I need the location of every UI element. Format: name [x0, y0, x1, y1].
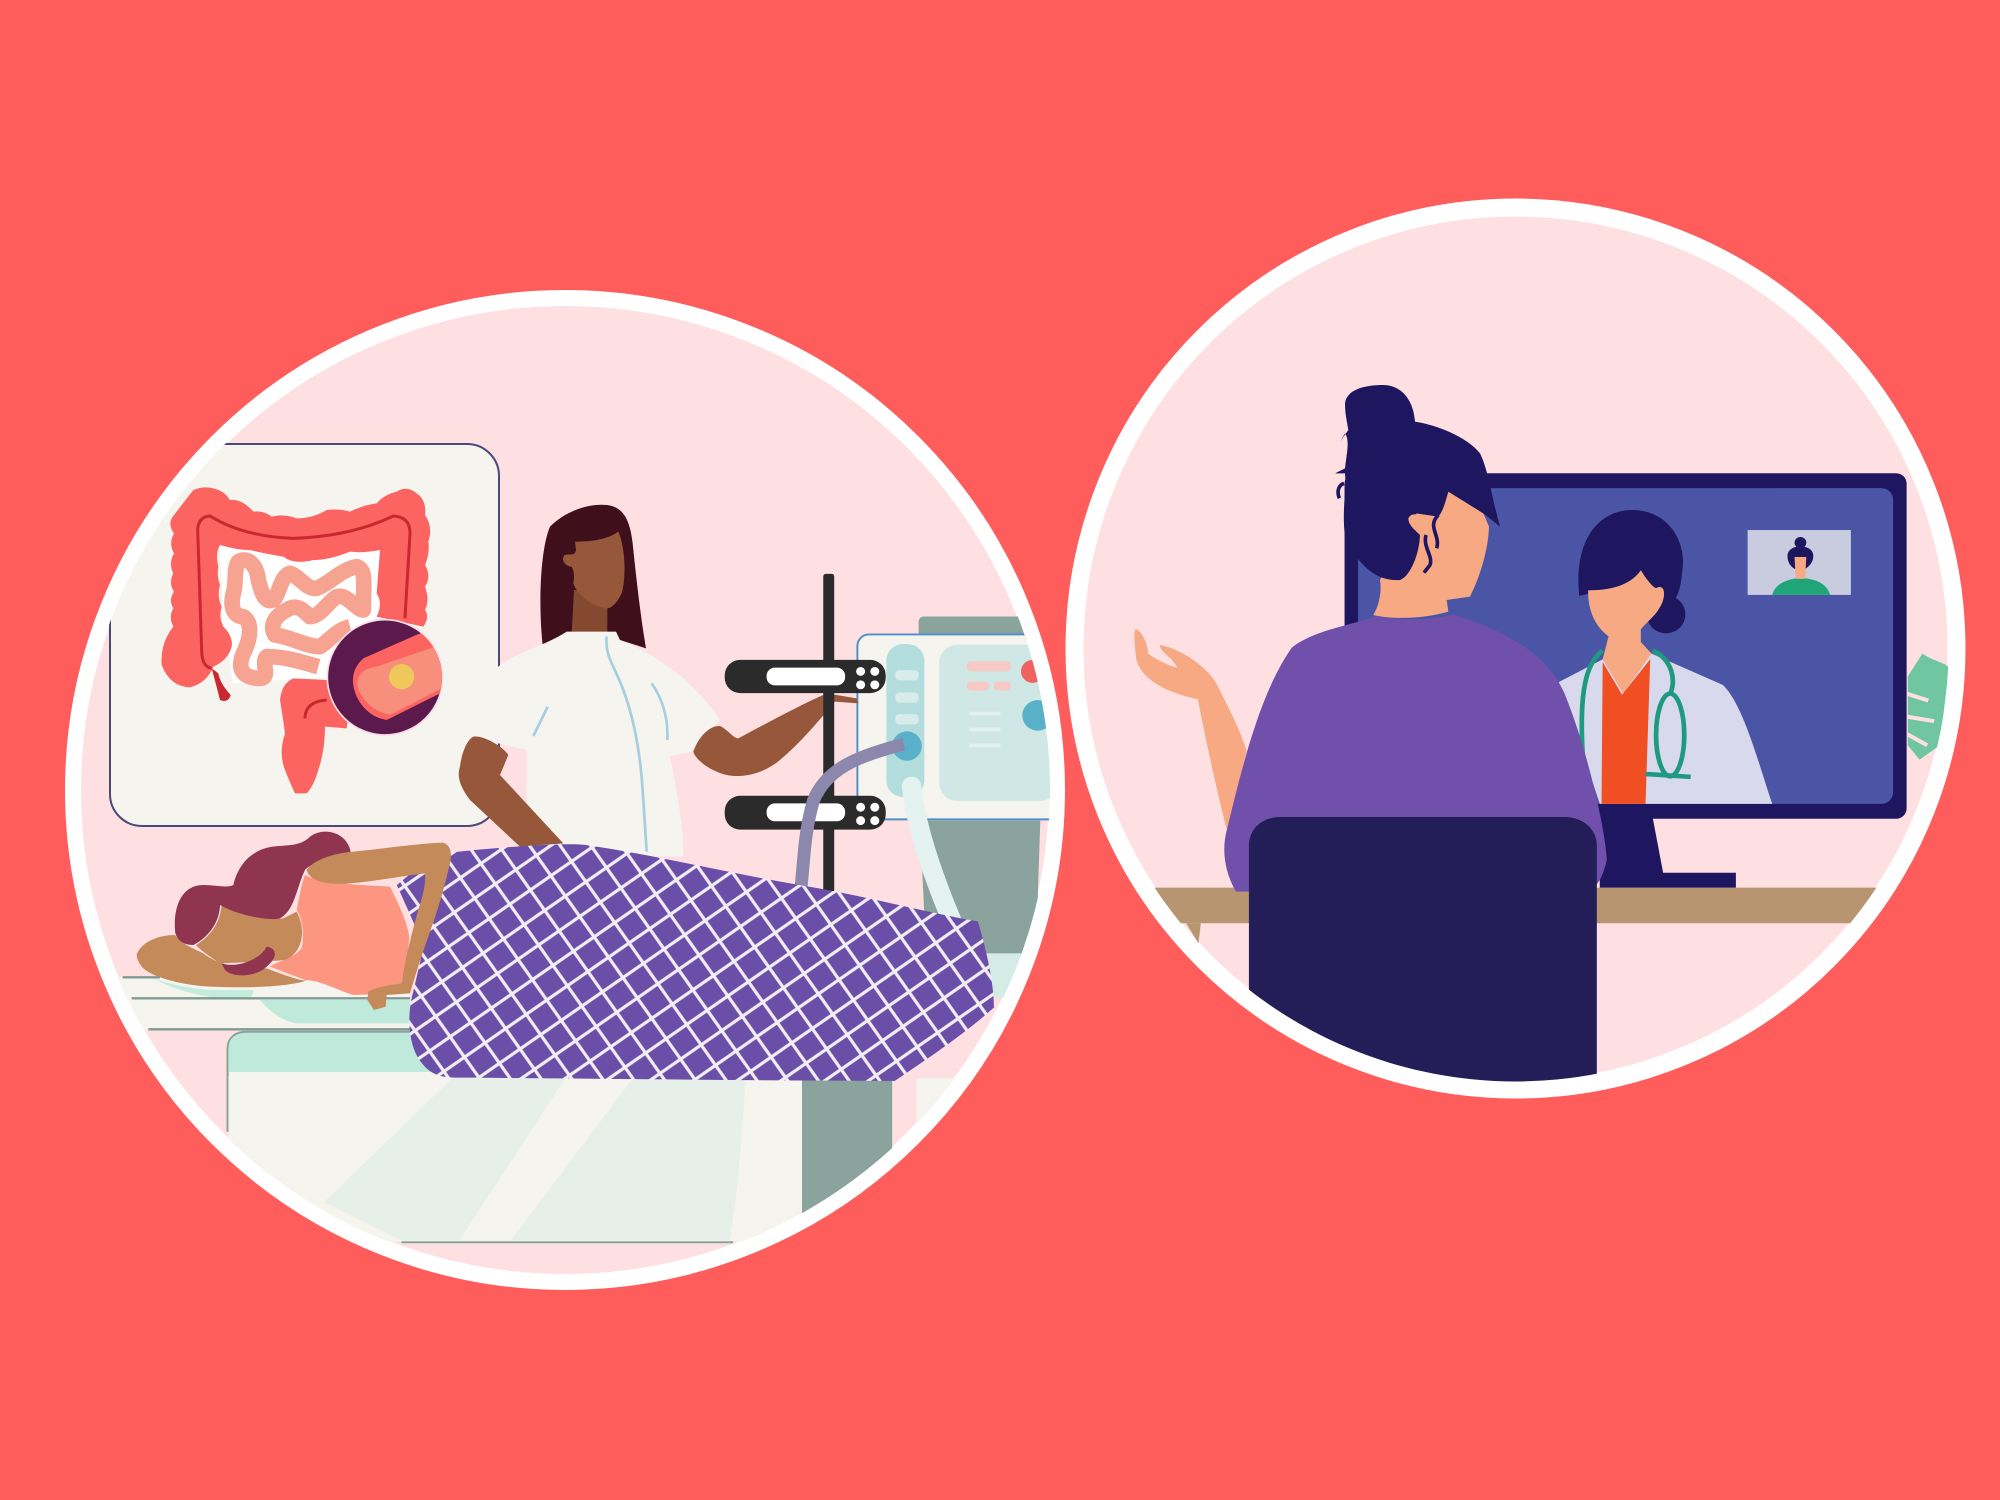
right arm: [693, 693, 858, 776]
magnifier: [327, 620, 447, 735]
room and screen layer: [1134, 473, 1949, 1095]
patient body: [137, 832, 409, 995]
panel: telehealth scene: [1074, 208, 1956, 1095]
large intestine: [161, 487, 430, 687]
patient draped arm and hand: [307, 843, 451, 1010]
poster: anatomy chart background: [110, 444, 499, 826]
salmon top: [270, 875, 409, 995]
neck: [572, 590, 607, 633]
hair lock: [222, 947, 275, 975]
video thumbnail: [1748, 530, 1851, 595]
clipped scene content: [1134, 385, 1949, 1095]
head and neck: [196, 905, 302, 963]
doctor on screen: [1559, 510, 1772, 804]
office chair: [1249, 817, 1597, 1095]
white coat: [498, 632, 720, 856]
supporting arm: [137, 935, 307, 987]
endoscopy machine: [857, 617, 1064, 998]
colon inner line: [198, 516, 410, 718]
appendix: [212, 668, 231, 701]
circle frame: [73, 298, 1057, 1282]
hair: [540, 505, 646, 648]
bed head section: [100, 977, 410, 1029]
face: [1588, 570, 1664, 694]
doctor figure: [450, 505, 858, 857]
hair: [1578, 510, 1683, 608]
bed base: [227, 1032, 962, 1251]
IV pole with clamps: [725, 574, 886, 893]
stethoscope: [1582, 651, 1691, 777]
plant leaf: [1907, 653, 1949, 760]
raised arm and hand: [1134, 629, 1247, 831]
panel: colonoscopy scene: [73, 298, 1064, 1282]
shirt: [1602, 659, 1650, 804]
patient head seen from behind: [1335, 385, 1500, 618]
ear and curls: [1408, 514, 1425, 535]
hair and bun: [1335, 385, 1500, 580]
circle frame: [1074, 208, 1956, 1090]
coat: [1559, 653, 1772, 804]
left arm: [459, 737, 563, 847]
purple sweater: [1224, 614, 1607, 892]
hair: [175, 832, 351, 945]
face and neck: [1373, 492, 1489, 618]
tubes: [801, 744, 952, 921]
blanket: [397, 844, 994, 1081]
small intestine: [232, 560, 364, 678]
desk: [1148, 888, 1878, 943]
icon: intestines and magnified section: [161, 487, 447, 793]
rectum: [280, 678, 350, 793]
monitor: [1345, 473, 1907, 888]
clipped scene content: [100, 444, 1064, 1251]
white abdomen area: [220, 545, 380, 683]
face: [563, 532, 625, 608]
